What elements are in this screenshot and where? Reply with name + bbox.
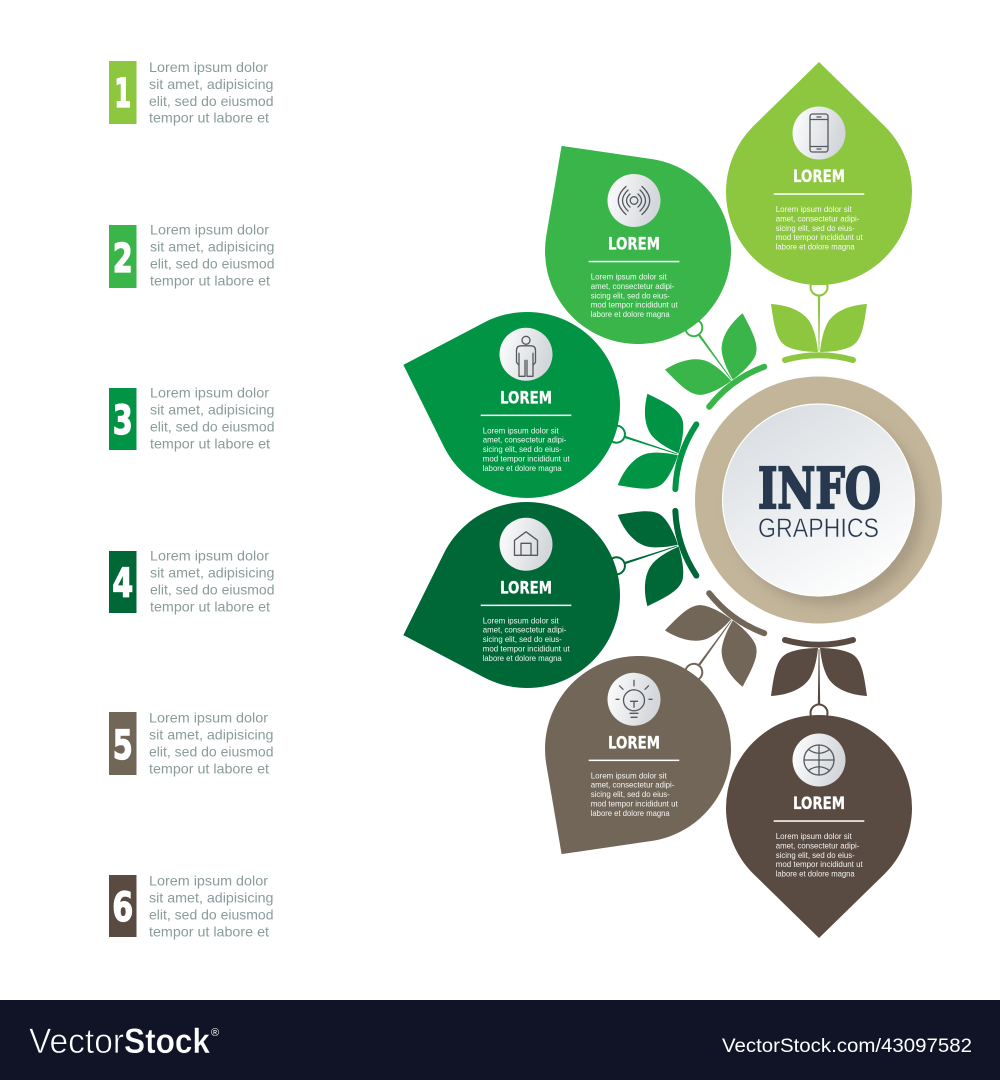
central hub circle — [695, 376, 942, 624]
legend item 3: sit amet, adipisicing — [150, 402, 274, 418]
legend item 2: Lorem ipsum dolor — [150, 222, 269, 238]
legend item 2: tempor ut labore et — [150, 272, 270, 288]
panel 3: person drop: amet, consectetur adipi- — [483, 435, 566, 445]
icon: wireless signal — [608, 174, 660, 227]
footer logo: ® — [211, 1027, 219, 1039]
legend item 4 — [109, 548, 274, 614]
legend item 6: tempor ut labore et — [149, 924, 269, 940]
panel 2: wireless drop: Lorem ipsum dolor sit — [591, 272, 667, 282]
icon: basketball — [792, 734, 846, 786]
panel 4: house drop: amet, consectetur adipi- — [483, 625, 566, 635]
panel 1: phone drop: LOREM — [793, 167, 845, 186]
panel 3: person drop: mod tempor incididunt ut — [483, 453, 570, 463]
panel 6: basketball drop: Lorem ipsum dolor sit — [776, 831, 852, 841]
panel 5: light bulb drop — [486, 619, 768, 909]
panel 4: house drop: LOREM — [500, 578, 552, 597]
sprout connector 6 — [771, 640, 867, 722]
panel 1: phone drop: mod tempor incididunt ut — [776, 232, 863, 242]
panel 1: phone drop: amet, consectetur adipi- — [776, 213, 859, 223]
legend item 6 — [109, 872, 274, 940]
icon: person — [500, 328, 552, 381]
icon: house — [500, 518, 552, 571]
legend item 3: tempor ut labore et — [150, 436, 270, 452]
legend item 5 — [109, 710, 274, 776]
legend item 5: 5 — [113, 723, 133, 769]
legend item 2 — [109, 222, 274, 288]
sprout connector 2 — [650, 293, 776, 415]
legend item 5: Lorem ipsum dolor — [149, 710, 268, 726]
legend item 5: elit, sed do eiusmod — [149, 744, 274, 760]
panel 3: person drop: LOREM — [500, 388, 552, 407]
panel 2: wireless drop: labore et dolore magna — [591, 309, 670, 319]
legend item 6: sit amet, adipisicing — [149, 890, 274, 906]
footer bar — [0, 1000, 1000, 1080]
legend item 2: 2 — [113, 236, 133, 282]
panel 3: person drop: sicing elit, sed do eius- — [483, 444, 562, 454]
legend item 6: Lorem ipsum dolor — [149, 872, 268, 888]
legend item 5: tempor ut labore et — [149, 760, 269, 776]
panel 2: wireless drop — [486, 91, 768, 381]
panel 3: person drop — [375, 276, 644, 522]
panel 2: wireless drop: mod tempor incididunt ut — [591, 300, 678, 310]
sprout connector 3 — [594, 386, 701, 502]
legend item 1: sit amet, adipisicing — [149, 76, 274, 92]
footer image id: VectorStock.com/43097582 — [722, 1035, 972, 1057]
subtitle: GRAPHICS: GRAPHICS — [758, 513, 879, 543]
panel 6: basketball drop — [726, 715, 912, 938]
panel 2: wireless drop: LOREM — [608, 234, 660, 254]
panel 2: wireless drop: amet, consectetur adipi- — [591, 281, 674, 291]
legend item 5: sit amet, adipisicing — [149, 726, 274, 742]
panel 4: house drop — [375, 478, 644, 724]
legend item 6: 6 — [112, 885, 133, 931]
sprout connector 1 — [771, 278, 867, 360]
icon: light bulb — [608, 673, 660, 726]
panel 1: phone drop: Lorem ipsum dolor sit — [776, 204, 852, 214]
panel 6: basketball drop: mod tempor incididunt ut — [776, 859, 863, 869]
legend item 2: elit, sed do eiusmod — [150, 256, 274, 272]
panel 6: basketball drop: amet, consectetur adipi- — [776, 840, 859, 850]
panel 6: basketball drop: sicing elit, sed do eius- — [776, 850, 855, 860]
footer logo — [29, 1022, 219, 1061]
legend item 4: 4 — [112, 561, 133, 607]
legend item 4: elit, sed do eiusmod — [150, 582, 274, 598]
legend item 3: Lorem ipsum dolor — [150, 384, 269, 400]
legend item 6: elit, sed do eiusmod — [149, 906, 274, 922]
legend item 1: 1 — [114, 71, 131, 117]
panel 4: house drop: mod tempor incididunt ut — [483, 643, 570, 653]
panel 1: phone drop: labore et dolore magna — [776, 242, 855, 252]
panel 5: light bulb drop: sicing elit, sed do eius- — [591, 789, 670, 799]
panel 4: house drop: Lorem ipsum dolor sit — [483, 615, 559, 625]
legend item 3: elit, sed do eiusmod — [150, 418, 274, 434]
panel 5: light bulb drop: mod tempor incididunt ut — [591, 798, 678, 808]
panel 1: phone drop — [726, 62, 912, 285]
legend item 1: Lorem ipsum dolor — [149, 59, 268, 75]
panel 4: house drop: sicing elit, sed do eius- — [483, 634, 562, 644]
footer logo: Stock — [124, 1022, 210, 1061]
panel 3: person drop: Lorem ipsum dolor sit — [483, 425, 559, 435]
sprout connector 4 — [594, 498, 701, 614]
legend item 1: tempor ut labore et — [149, 110, 269, 126]
title: INFO: INFO — [758, 456, 881, 522]
panel 5: light bulb drop: LOREM — [608, 733, 660, 752]
panel 5: light bulb drop: labore et dolore magna — [591, 808, 670, 818]
legend item 1 — [109, 59, 274, 126]
footer logo: Vector — [29, 1022, 124, 1061]
legend item 4: tempor ut labore et — [150, 598, 270, 614]
panel 5: light bulb drop: amet, consectetur adipi- — [591, 780, 674, 790]
legend item 1: elit, sed do eiusmod — [149, 93, 274, 109]
legend item 3 — [109, 384, 274, 452]
icon: phone — [792, 106, 846, 160]
panel 1: phone drop: sicing elit, sed do eius- — [776, 223, 855, 233]
panel 6: basketball drop: LOREM — [793, 794, 845, 813]
panel 4: house drop: labore et dolore magna — [483, 653, 562, 663]
sprout connector 5 — [650, 585, 776, 707]
legend item 2: sit amet, adipisicing — [150, 238, 274, 254]
panel 5: light bulb drop: Lorem ipsum dolor sit — [591, 770, 667, 780]
legend item 4: Lorem ipsum dolor — [150, 548, 269, 564]
legend item 3: 3 — [113, 398, 133, 444]
legend item 4: sit amet, adipisicing — [150, 564, 274, 580]
panel 2: wireless drop: sicing elit, sed do eius- — [591, 290, 670, 300]
panel 6: basketball drop: labore et dolore magna — [776, 869, 855, 879]
panel 3: person drop: labore et dolore magna — [483, 463, 562, 473]
